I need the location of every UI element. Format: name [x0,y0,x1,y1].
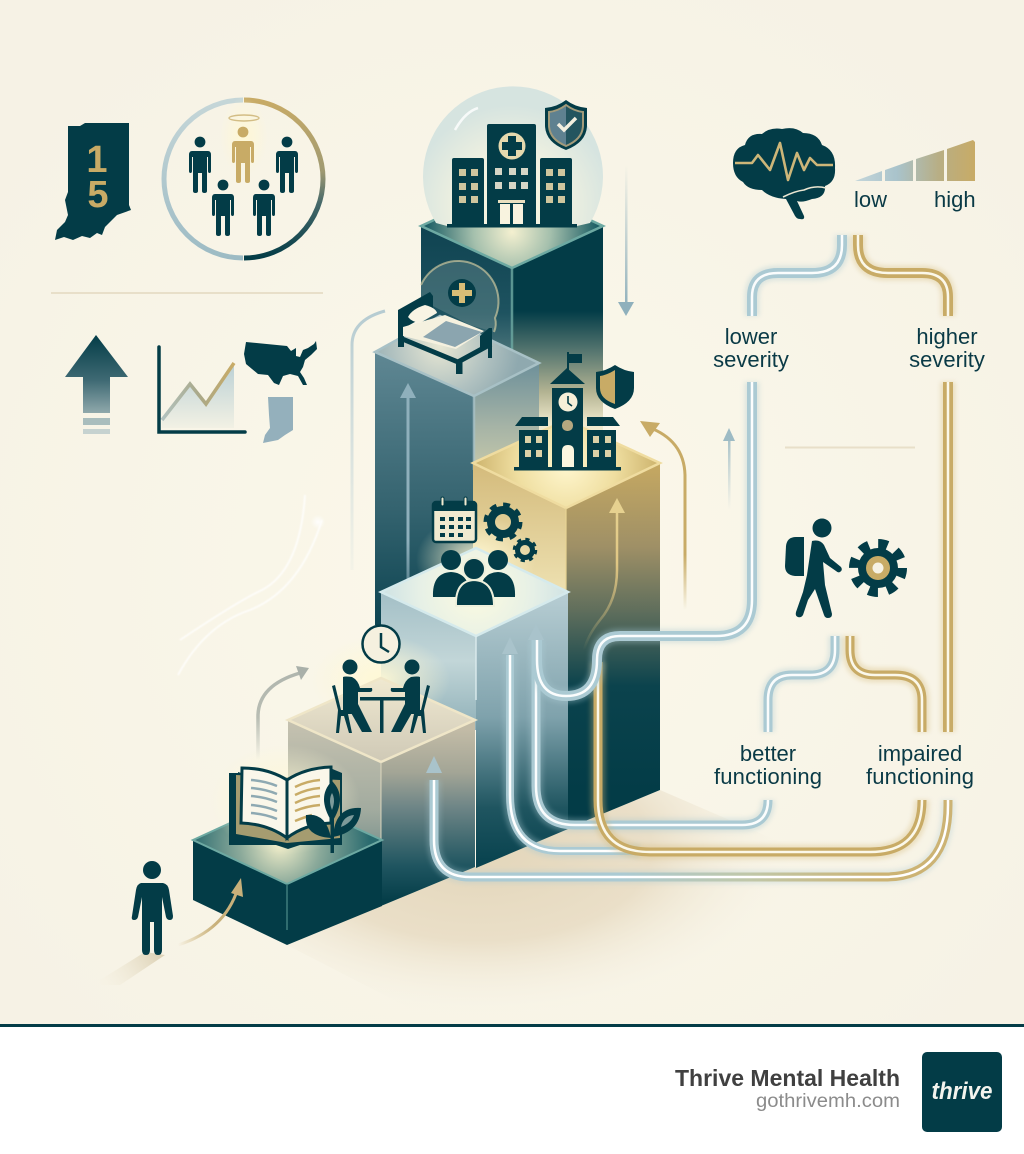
tube: impaired functioning [598,636,922,852]
icon: Indiana with 1 in 5: 1 [86,139,108,181]
label: impaired functioning: impaired [878,741,962,766]
icon: hospital bed with plus [398,261,499,374]
tube: lower severity [537,235,842,696]
icon: brain with pulse [733,128,835,219]
icon: therapy meeting with clock [332,626,430,733]
block 3: team step [381,515,568,868]
arrow: curved gray to meeting [258,666,309,760]
footer: Thrive Mental Health [675,1065,900,1091]
tube: fourth blue to gold path [434,780,948,877]
divider right [785,446,915,448]
divider [51,292,323,294]
arrow: up on school block [584,498,625,650]
label: better functioning: functioning [714,764,822,789]
chart: rising trend [159,347,245,432]
footer: gothrivemh.com [756,1090,900,1112]
icon: walker with gear [785,518,902,618]
footer: thrive [932,1078,992,1105]
label: lower severity: lower [725,324,777,349]
arrow: tan curve into base [178,878,243,945]
tube: higher severity [858,235,948,732]
icon: Indiana with 1 in 5: 5 [87,174,109,216]
arrow: down beside hospital [618,165,634,316]
severity scale wedge [855,140,975,181]
icon: circle of five people [164,97,323,258]
block 6: hospital step [421,184,603,470]
arrow: curved up to bed [352,311,385,570]
decorative light wisps [178,495,325,675]
label: lower severity: severity [713,347,789,372]
icon: school with shield [514,352,634,470]
scale labels: low [854,187,887,212]
scale labels: high [934,187,976,212]
arrow: small up right [723,428,735,510]
label: impaired functioning: functioning [866,764,974,789]
icon: open book with plant [210,745,361,855]
label: better functioning: better [740,741,796,766]
icon: calendar, gears and team [433,497,536,606]
block 2: meeting step [288,635,475,906]
block 1: dark base step [193,797,382,945]
icon: Indiana small [263,397,293,443]
figure: person at base [132,861,173,955]
tube: better functioning [536,636,835,825]
icon: Indiana with 1 in 5 [55,123,131,240]
block 4: school step [473,420,660,829]
icon: up arrow [65,335,128,434]
arrow heads on blue tubes [426,624,544,773]
tube: third blue path [510,655,640,851]
block 5: bed step [375,316,539,625]
figure: person shadow [92,952,165,985]
icon: hospital with shield [423,86,603,228]
icon: USA map [244,341,317,385]
label: higher severity: higher [916,324,978,349]
footer [0,1024,1024,1154]
arrow: curved to school [640,421,685,610]
ground shadow [287,790,880,1024]
label: higher severity: severity [909,347,985,372]
scale labels [854,187,976,212]
arrow: up on bed block [400,383,416,635]
